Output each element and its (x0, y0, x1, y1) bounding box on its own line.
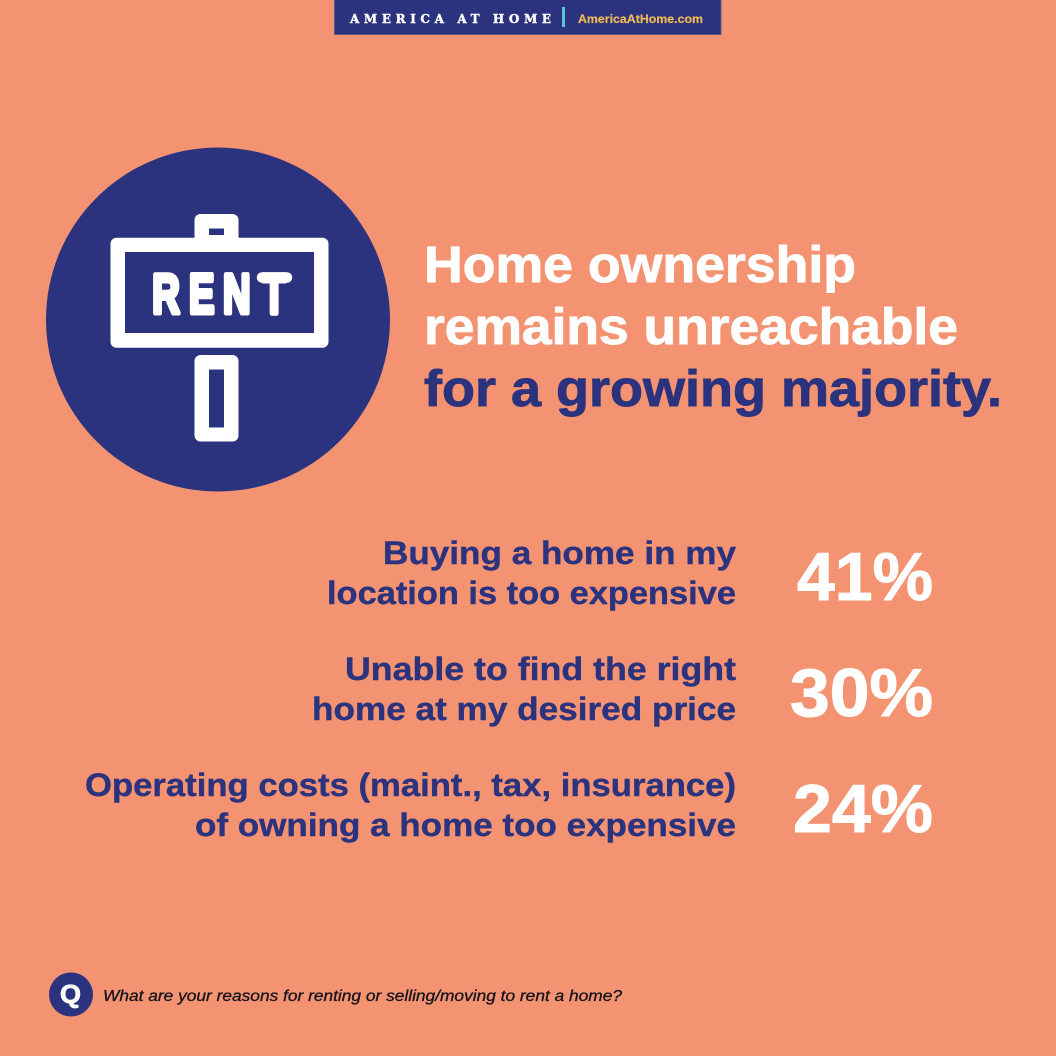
header banner: AMERICA AT HOME (349, 12, 551, 26)
header banner (334, 0, 721, 34)
stat row: operating costs 24%: 24% (793, 771, 933, 847)
stat row: operating costs 24%: of owning a home too expensive (195, 807, 736, 843)
stat row: too expensive 41%: Buying a home in my (383, 535, 736, 571)
stat row: operating costs 24% (85, 767, 933, 847)
header banner: AmericaAtHome.com (578, 12, 703, 26)
headline: for a growing majority. (424, 360, 1002, 417)
stat row: right home 30%: Unable to find the right (345, 651, 736, 687)
survey question: What are your reasons for renting or selling/moving to rent a home? (103, 988, 622, 1005)
stat row: right home 30% (312, 651, 933, 731)
stat row: right home 30%: home at my desired price (312, 691, 736, 727)
headline: Home ownership (424, 236, 856, 293)
icon: rent sign in circle: RENT (152, 264, 286, 326)
headline (424, 236, 1002, 417)
headline: remains unreachable (424, 298, 958, 355)
stat row: too expensive 41%: 41% (797, 539, 933, 615)
stat row: too expensive 41% (327, 535, 933, 615)
survey question (49, 972, 622, 1016)
stat row: right home 30%: 30% (790, 655, 933, 731)
survey question: Q (60, 979, 81, 1009)
icon: rent sign in circle (46, 148, 390, 492)
stat row: operating costs 24%: Operating costs (maint., tax, insurance) (85, 767, 736, 803)
stat row: too expensive 41%: location is too expensive (327, 575, 736, 611)
